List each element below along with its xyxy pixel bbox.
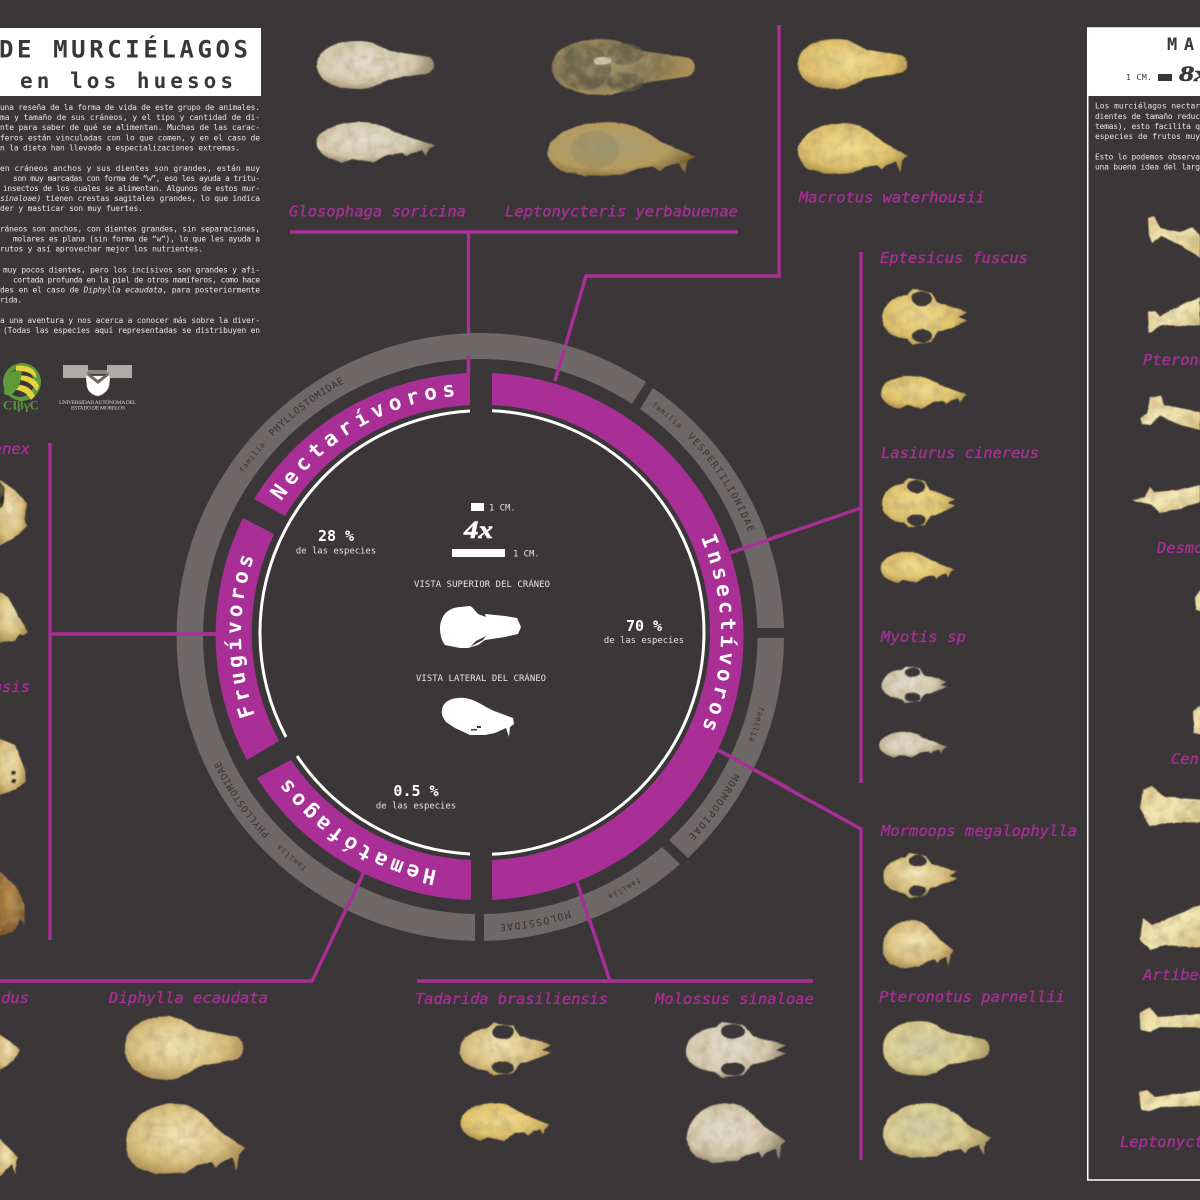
skulls: nectarívoros <box>317 39 695 176</box>
stat: hematófagos <box>376 782 456 812</box>
species labels: Myotis sp <box>880 628 966 646</box>
family ring <box>177 333 784 941</box>
stat: hematófagos: 0.5 % <box>393 782 439 800</box>
mandibles <box>1132 216 1200 1111</box>
intro text block: n la dieta han llevado a especializaciones extremas. <box>0 144 240 152</box>
intro text block: der y masticar son muy fuertes. <box>0 204 143 213</box>
stat: frugívoros and nectarívoros: de las especies <box>296 546 376 556</box>
connector overlays on grey ring <box>170 350 790 928</box>
right panel text: dientes de tamaño reduc <box>1095 112 1200 121</box>
family labels: familia <box>608 878 640 898</box>
diet ring labels: Insectívoros <box>701 534 738 730</box>
stat: insectívoros <box>604 617 684 646</box>
diet ring labels: Nectarívoros <box>270 384 454 500</box>
right panel text: temas), esto facilita q <box>1095 122 1200 131</box>
legend: vista lateral <box>416 672 546 737</box>
intro text block: (Todas las especies aquí representadas se distribuyen en <box>3 326 260 335</box>
family labels: familia <box>749 708 764 741</box>
family labels: MORMOOPIDAE <box>688 774 740 840</box>
logo: Universidad Autónoma del Estado de Morelos: ESTADO DE MORELOS <box>71 406 125 412</box>
scale legend: 1 CM. <box>513 550 540 560</box>
diet ring labels: Frugívoros <box>224 556 254 718</box>
diet ring labels <box>224 384 738 886</box>
right panel: 1 CM. <box>1126 72 1152 82</box>
species labels: Leptonycteris yerbabuenae <box>505 202 738 220</box>
legend: vista superior: VISTA SUPERIOR DEL CRÁNEO <box>414 578 550 590</box>
intro text block: feros están vinculadas con lo que comen, y en el caso de <box>0 133 260 142</box>
stat: insectívoros: 70 % <box>626 617 662 635</box>
intro text block: en cráneos anchos y sus dientes son grandes, están muy <box>0 164 260 173</box>
logo: CIByC <box>3 363 41 412</box>
stat: hematófagos: de las especies <box>376 802 456 812</box>
skulls: vespertilionidae <box>880 289 967 757</box>
logo: Universidad Autónoma del Estado de Morelos <box>59 365 137 412</box>
diet ring labels: Hematófagos <box>281 780 436 886</box>
species labels: Glosophaga soricina <box>289 202 466 220</box>
intro text block: una reseña de la forma de vida de este grupo de animales. <box>0 103 260 112</box>
skulls: Macrotus <box>798 39 908 174</box>
intro text block: sinaloae) tienen crestas sagitales grandes, lo que indica <box>0 194 260 203</box>
diet ring <box>216 373 744 900</box>
family labels: familia <box>653 402 681 428</box>
intro text block: molares es plana (sin forma de “w”), lo que les ayuda a <box>13 234 260 244</box>
title block: en los huesos <box>20 69 233 93</box>
right panel <box>1087 28 1200 1180</box>
intro text block: des en el caso de Diphylla ecaudata, para posteriormente <box>0 286 260 294</box>
right panel text: una buena idea del larg <box>1095 162 1200 172</box>
species labels: Molossus sinaloae <box>654 990 814 1008</box>
family labels: PHYLLOSTOMIDAE <box>268 377 344 436</box>
right panel text: Los murciélagos nectar <box>1095 100 1200 110</box>
title block <box>0 28 261 96</box>
intro text block: rutos y así aprovechar mejor los nutrientes. <box>0 244 203 254</box>
scale legend: 1 CM. <box>489 504 516 514</box>
skulls: molossidae <box>460 1022 786 1162</box>
stat: frugívoros and nectarívoros <box>296 527 376 556</box>
species labels: Eptesicus fuscus <box>880 249 1028 267</box>
intro text block: insectos de los cuales se alimentan. Algunos de estos mur- <box>3 184 260 193</box>
legend: vista superior <box>414 578 550 648</box>
right panel text: especies de frutos muy <box>1095 132 1200 141</box>
skulls: frugívoros <box>0 478 28 936</box>
skulls: hematófagos <box>0 1016 245 1180</box>
stat: insectívoros: de las especies <box>604 636 684 646</box>
family labels: PHYLLOSTOMIDAE <box>214 762 270 838</box>
title block: DE MURCIÉLAGOS <box>0 34 248 64</box>
intro text block <box>0 103 260 335</box>
species labels: Pteronotus parnellii <box>879 988 1065 1006</box>
scale legend: 4x <box>463 517 493 544</box>
connector lines <box>0 25 861 1160</box>
intro text block: ráneos son anchos, con dientes grandes, sin separaciones, <box>0 224 260 234</box>
inner white ring <box>260 411 704 854</box>
family labels: MOLOSSIDAE <box>500 911 571 932</box>
logo: CIByC: CIβγC <box>3 398 39 412</box>
species labels: Diphylla ecaudata <box>108 989 268 1007</box>
species labels: Macrotus waterhousii <box>798 188 985 206</box>
logo: Universidad Autónoma del Estado de Morelos: UNIVERSIDAD AUTÓNOMA DEL <box>59 398 137 406</box>
scale legend <box>452 503 540 560</box>
intro text block: ma y tamaño de sus cráneos, y el tipo y cantidad de di- <box>0 113 260 122</box>
intro text block: cortada profunda en la piel de otros mamíferos, como hace <box>13 276 260 284</box>
family labels: VESPERTILIONIDAE <box>688 432 754 532</box>
intro text block: nte para saber de qué se alimentan. Muchas de las carac- <box>0 122 260 132</box>
skulls: mormoopidae <box>883 853 991 1158</box>
species labels: Tadarida brasiliensis <box>415 990 608 1008</box>
intro text block: a una aventura y nos acerca a conocer más sobre la diver- <box>0 316 260 325</box>
legend: vista lateral: VISTA LATERAL DEL CRÁNEO <box>416 672 546 684</box>
family labels: familia <box>240 443 265 472</box>
species labels: Lasiurus cinereus <box>881 444 1039 462</box>
right panel text: Esto lo podemos observa <box>1095 152 1200 162</box>
intro text block: muy pocos dientes, pero los incisivos son grandes y afi- <box>3 266 260 274</box>
family labels: familia <box>278 844 306 870</box>
stat: frugívoros and nectarívoros: 28 % <box>318 527 354 545</box>
intro text block: son muy marcadas con forma de “w”, eso les ayuda a tritu- <box>13 174 260 183</box>
intro text block: rida. <box>0 296 22 305</box>
right panel text <box>1095 100 1200 172</box>
family labels <box>214 377 764 932</box>
species labels: Mormoops megalophylla <box>880 822 1077 840</box>
